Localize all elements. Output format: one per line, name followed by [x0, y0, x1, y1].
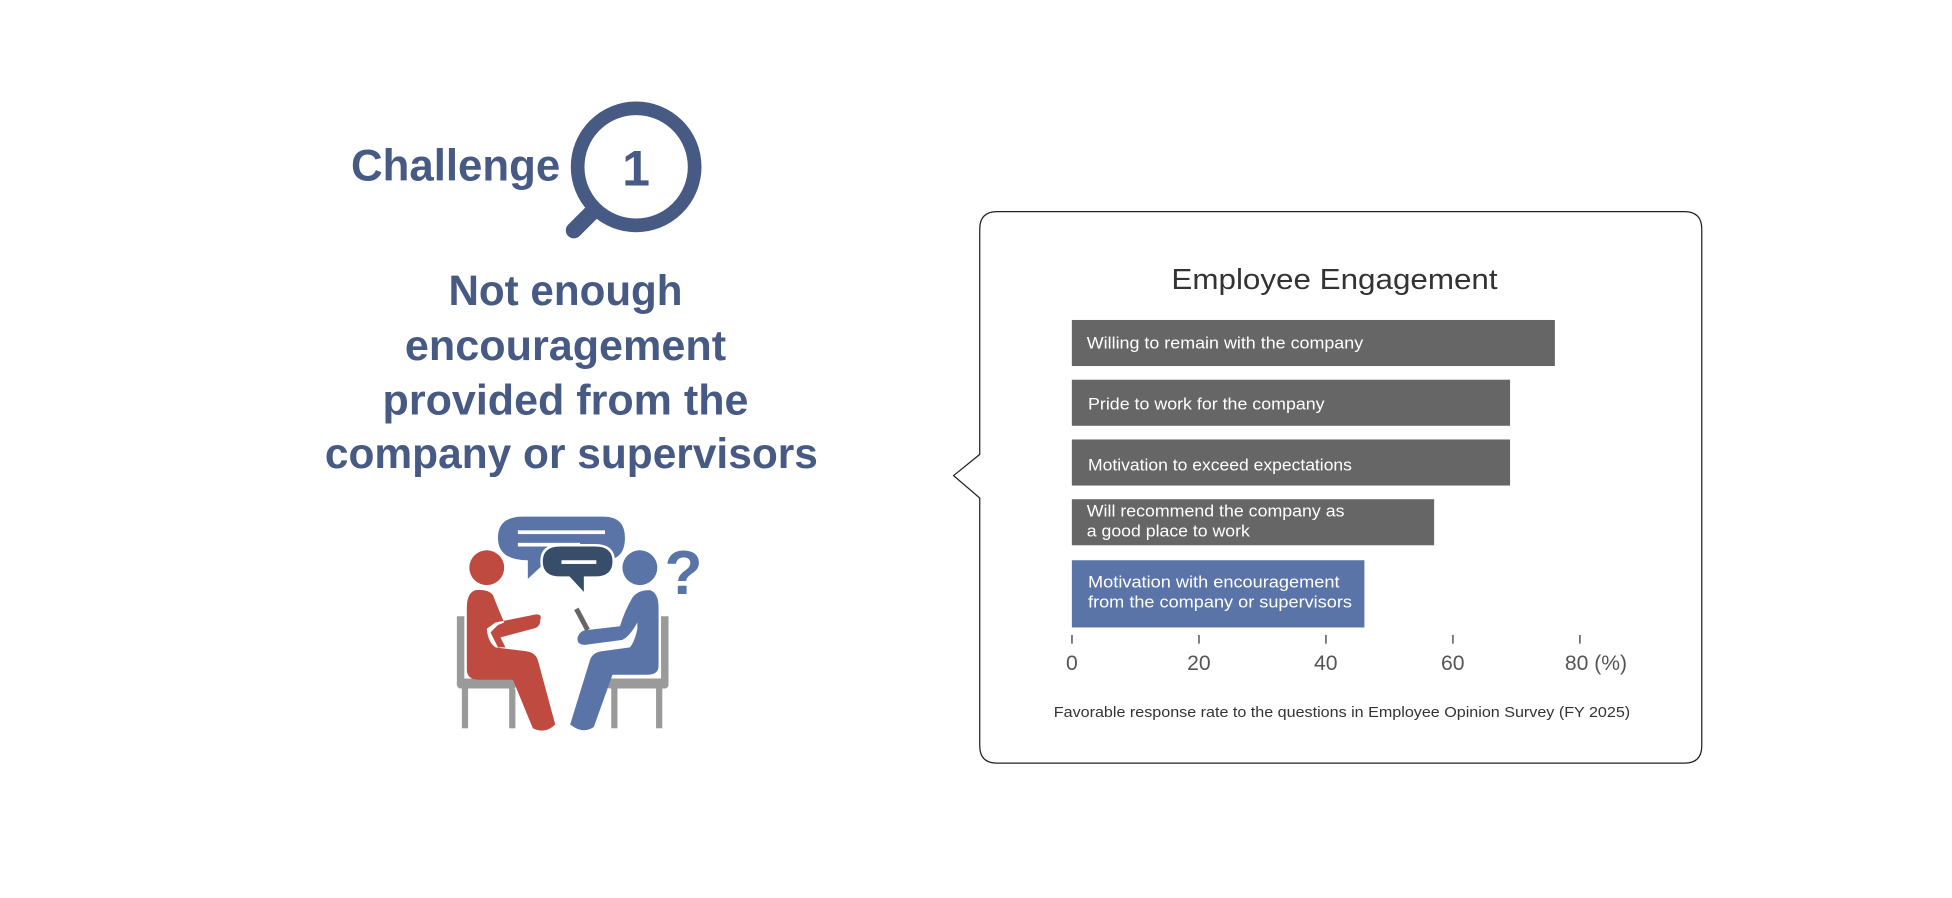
red person	[467, 550, 555, 731]
headline text: company or supervisors	[325, 430, 818, 477]
chart title: Employee Engagement	[1171, 264, 1498, 296]
x axis: 20	[1187, 652, 1211, 675]
bar chart	[1066, 320, 1627, 675]
x axis: 0	[1066, 652, 1078, 675]
bar: will recommend	[1072, 499, 1434, 545]
bar: motivation to exceed: Motivation to exceed expectations	[1088, 456, 1352, 475]
blue person	[570, 550, 659, 730]
bar: will recommend: a good place to work	[1087, 522, 1250, 541]
icon: question mark: ?	[664, 539, 702, 608]
headline text: Not enough	[449, 267, 683, 314]
bar: pride	[1072, 380, 1510, 426]
heading: Challenge 1	[351, 108, 695, 230]
icon: magnifier	[574, 108, 695, 230]
chairs	[457, 616, 669, 728]
illustration: two people talking	[457, 517, 702, 731]
icon: magnifier: 1	[622, 141, 650, 197]
bar: motivation to exceed	[1072, 439, 1510, 486]
x axis: 40	[1314, 652, 1338, 675]
bar: motivation with encouragement (highlight): from the company or supervisors	[1088, 593, 1352, 612]
bar: motivation with encouragement (highlight): Motivation with encouragement	[1088, 573, 1340, 592]
bar: motivation with encouragement (highlight)	[1072, 560, 1364, 627]
bar: pride: Pride to work for the company	[1088, 395, 1325, 414]
bar: will recommend: Will recommend the company as	[1087, 502, 1344, 521]
callout panel: employee engagement	[954, 212, 1702, 763]
pen	[576, 609, 588, 630]
headline text: encouragement	[405, 322, 726, 369]
headline text: provided from the	[383, 377, 749, 424]
speech bubble: small dark	[542, 545, 614, 595]
speech bubble: large	[498, 517, 625, 579]
text: Challenge: Challenge	[351, 141, 560, 191]
footnote: Favorable response rate to the questions in Employee Opinion Survey (FY 2025)	[1054, 704, 1630, 721]
x axis	[1066, 635, 1627, 675]
x axis: 80 (%)	[1565, 652, 1627, 675]
x axis: 60	[1441, 652, 1465, 675]
bar: willing to remain	[1072, 320, 1555, 366]
headline text	[325, 267, 818, 477]
bar: willing to remain: Willing to remain with the company	[1087, 334, 1364, 353]
